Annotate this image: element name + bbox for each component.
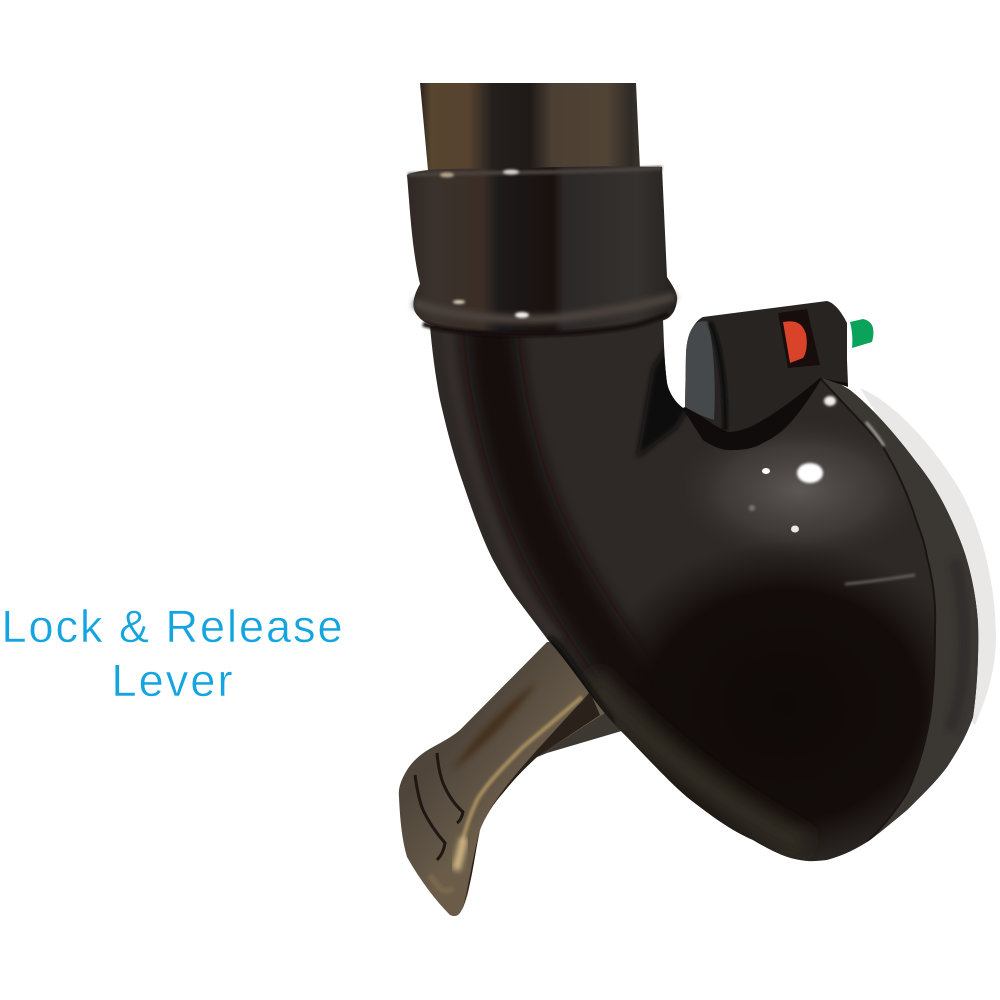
- indicator window: [778, 309, 820, 368]
- white rear disc: [860, 388, 996, 725]
- dome rim band: [822, 378, 978, 842]
- neck shading: [490, 320, 650, 700]
- upper dome glow: [706, 436, 893, 544]
- switch housing: [683, 301, 873, 450]
- collar: [407, 166, 677, 334]
- red indicator: [783, 321, 807, 363]
- photo: walker lever assembly: [399, 83, 1000, 916]
- caption: Lock & Release Lever: Lever: [112, 655, 232, 706]
- lower edge band: [590, 680, 805, 848]
- caption: Lock & Release Lever: Lock & Release: [2, 601, 342, 652]
- green indicator: [850, 319, 873, 348]
- lever handle: [399, 640, 625, 916]
- dark base band: [683, 360, 848, 450]
- upper tube: [420, 83, 640, 170]
- caption: Lock & Release Lever: [2, 601, 342, 706]
- dome highlights: [797, 463, 823, 483]
- dome body: [430, 320, 1000, 880]
- lever underside strut: [530, 690, 625, 760]
- dark lower dome: [621, 556, 958, 861]
- lever ridges: [437, 753, 463, 823]
